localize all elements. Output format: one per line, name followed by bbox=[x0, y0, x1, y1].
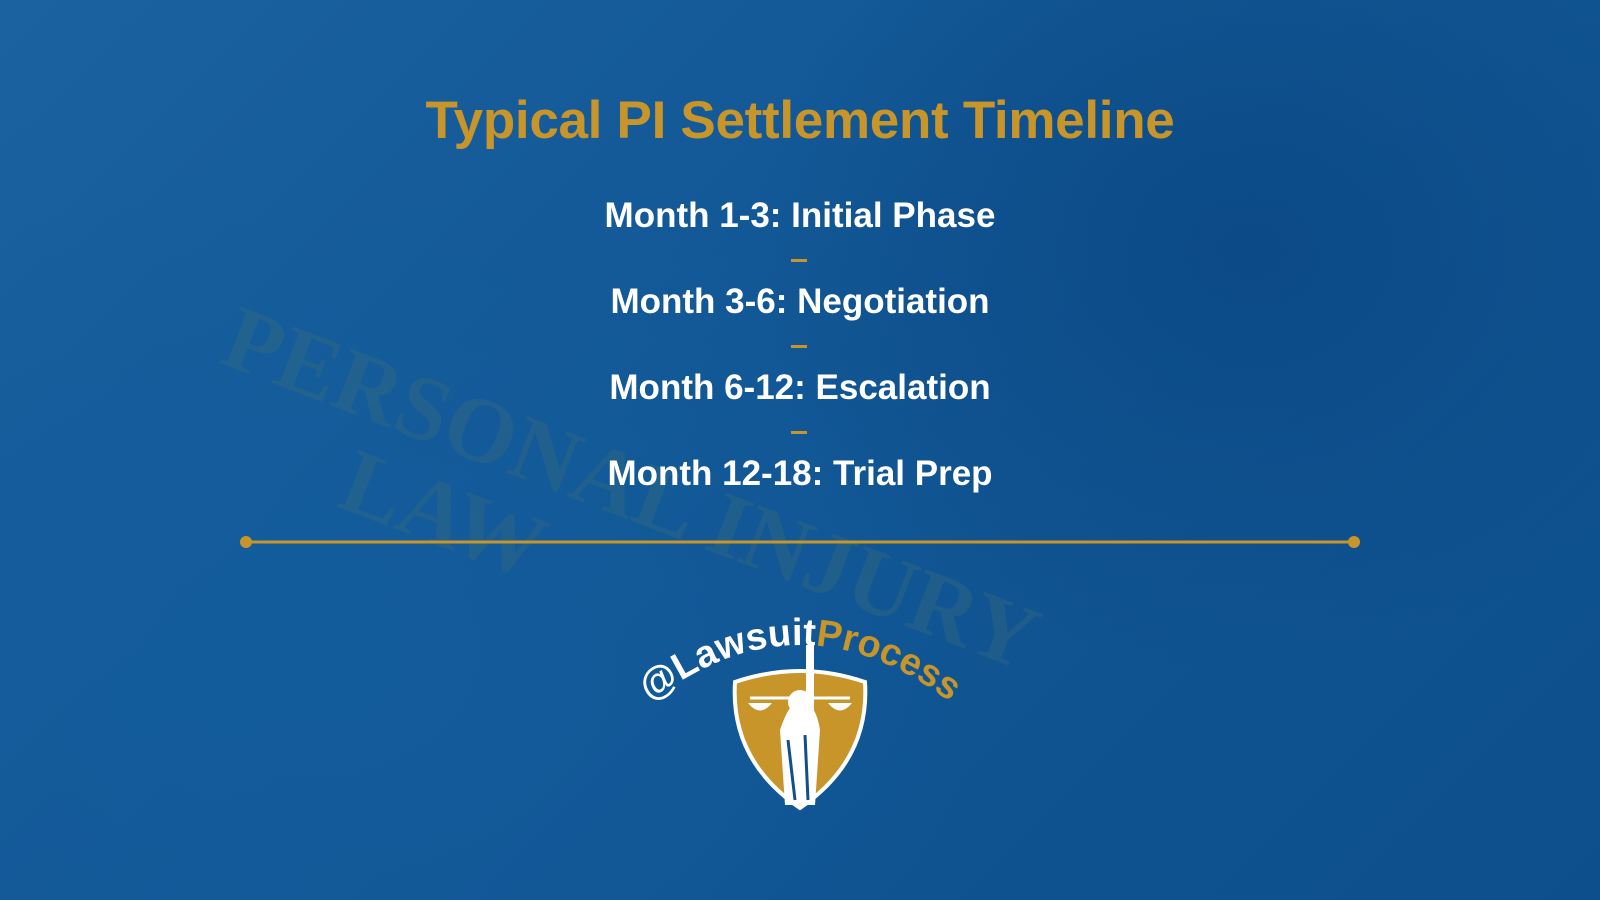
dash 3 bbox=[791, 431, 807, 434]
dash 2 bbox=[791, 345, 807, 348]
item 1: Month 1-3: Initial Phase bbox=[605, 196, 995, 235]
logo shield bbox=[735, 645, 865, 808]
item 4: Month 12-18: Trial Prep bbox=[607, 454, 993, 493]
logo bbox=[643, 618, 958, 810]
item 3: Month 6-12: Escalation bbox=[609, 368, 991, 407]
item 2: Month 3-6: Negotiation bbox=[610, 282, 990, 321]
background watermark text: LAW bbox=[328, 429, 560, 599]
background watermark text: PERSONAL INJURY bbox=[210, 285, 1053, 690]
title: Typical PI Settlement Timeline bbox=[426, 91, 1174, 150]
divider line with end dots bbox=[240, 536, 1360, 548]
timeline list bbox=[605, 196, 995, 493]
logo arc text: @LawsuitProcess bbox=[643, 618, 958, 700]
dash 1 bbox=[791, 259, 807, 262]
